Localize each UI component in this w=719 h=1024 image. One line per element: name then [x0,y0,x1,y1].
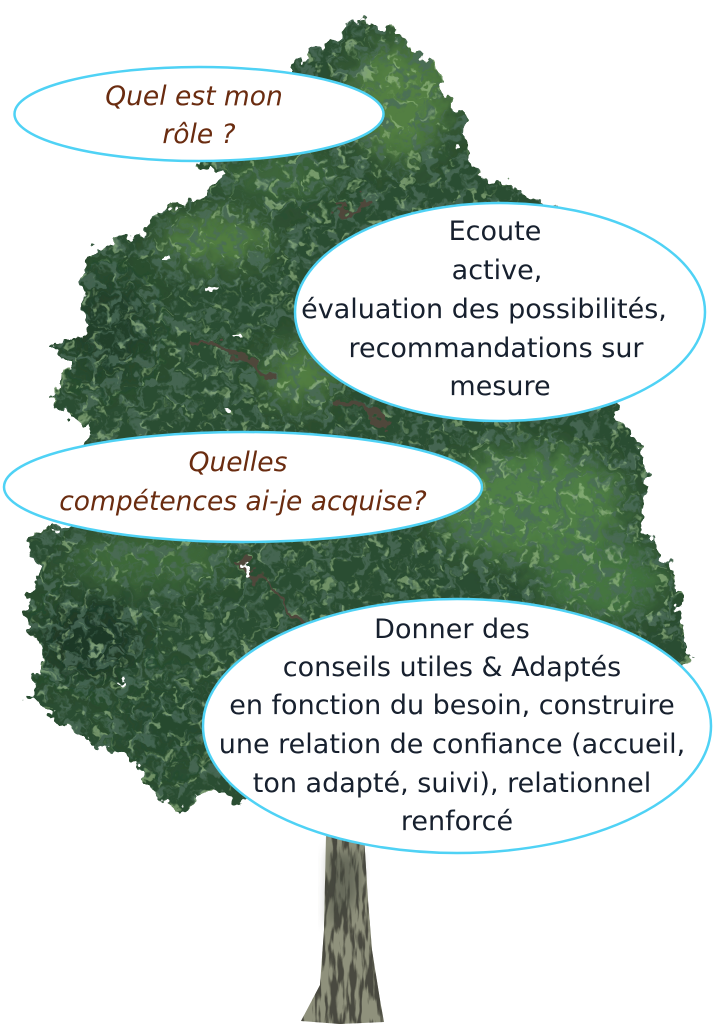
bubble: question role: rôle ? [162,119,236,150]
tree trunk [301,835,384,1024]
bubble: question role [14,67,384,161]
bubble: answer role: évaluation des possibilités, [301,294,667,325]
bubble: answer skills: renforcé [401,806,513,837]
branches [195,195,385,625]
bubble: answer role: recommandations sur [348,333,644,364]
bubble: answer skills: ton adapté, suivi), relationnel [253,768,651,799]
bubble: answer skills [203,599,711,853]
bubble: answer role: Ecoute [449,216,541,247]
foliage light patches [40,40,660,760]
bubble: answer skills: conseils utiles & Adaptés [283,652,621,683]
bubble: question skills: Quelles [189,447,288,478]
bubble: question skills [4,432,482,542]
bubble: answer role [295,203,705,421]
bubble: answer role: active, [452,255,542,286]
bubble: question skills: compétences ai-je acquise? [59,486,427,517]
gaps in foliage [117,252,253,683]
bubble: answer skills: en fonction du besoin, construire [229,690,675,721]
tree crown foliage [22,15,694,814]
bubble: answer skills: Donner des [374,614,530,645]
bubble: answer skills: une relation de confiance (accueil, [219,729,685,760]
bubble: answer role: mesure [449,371,551,402]
bubble: question role: Quel est mon [105,81,283,112]
